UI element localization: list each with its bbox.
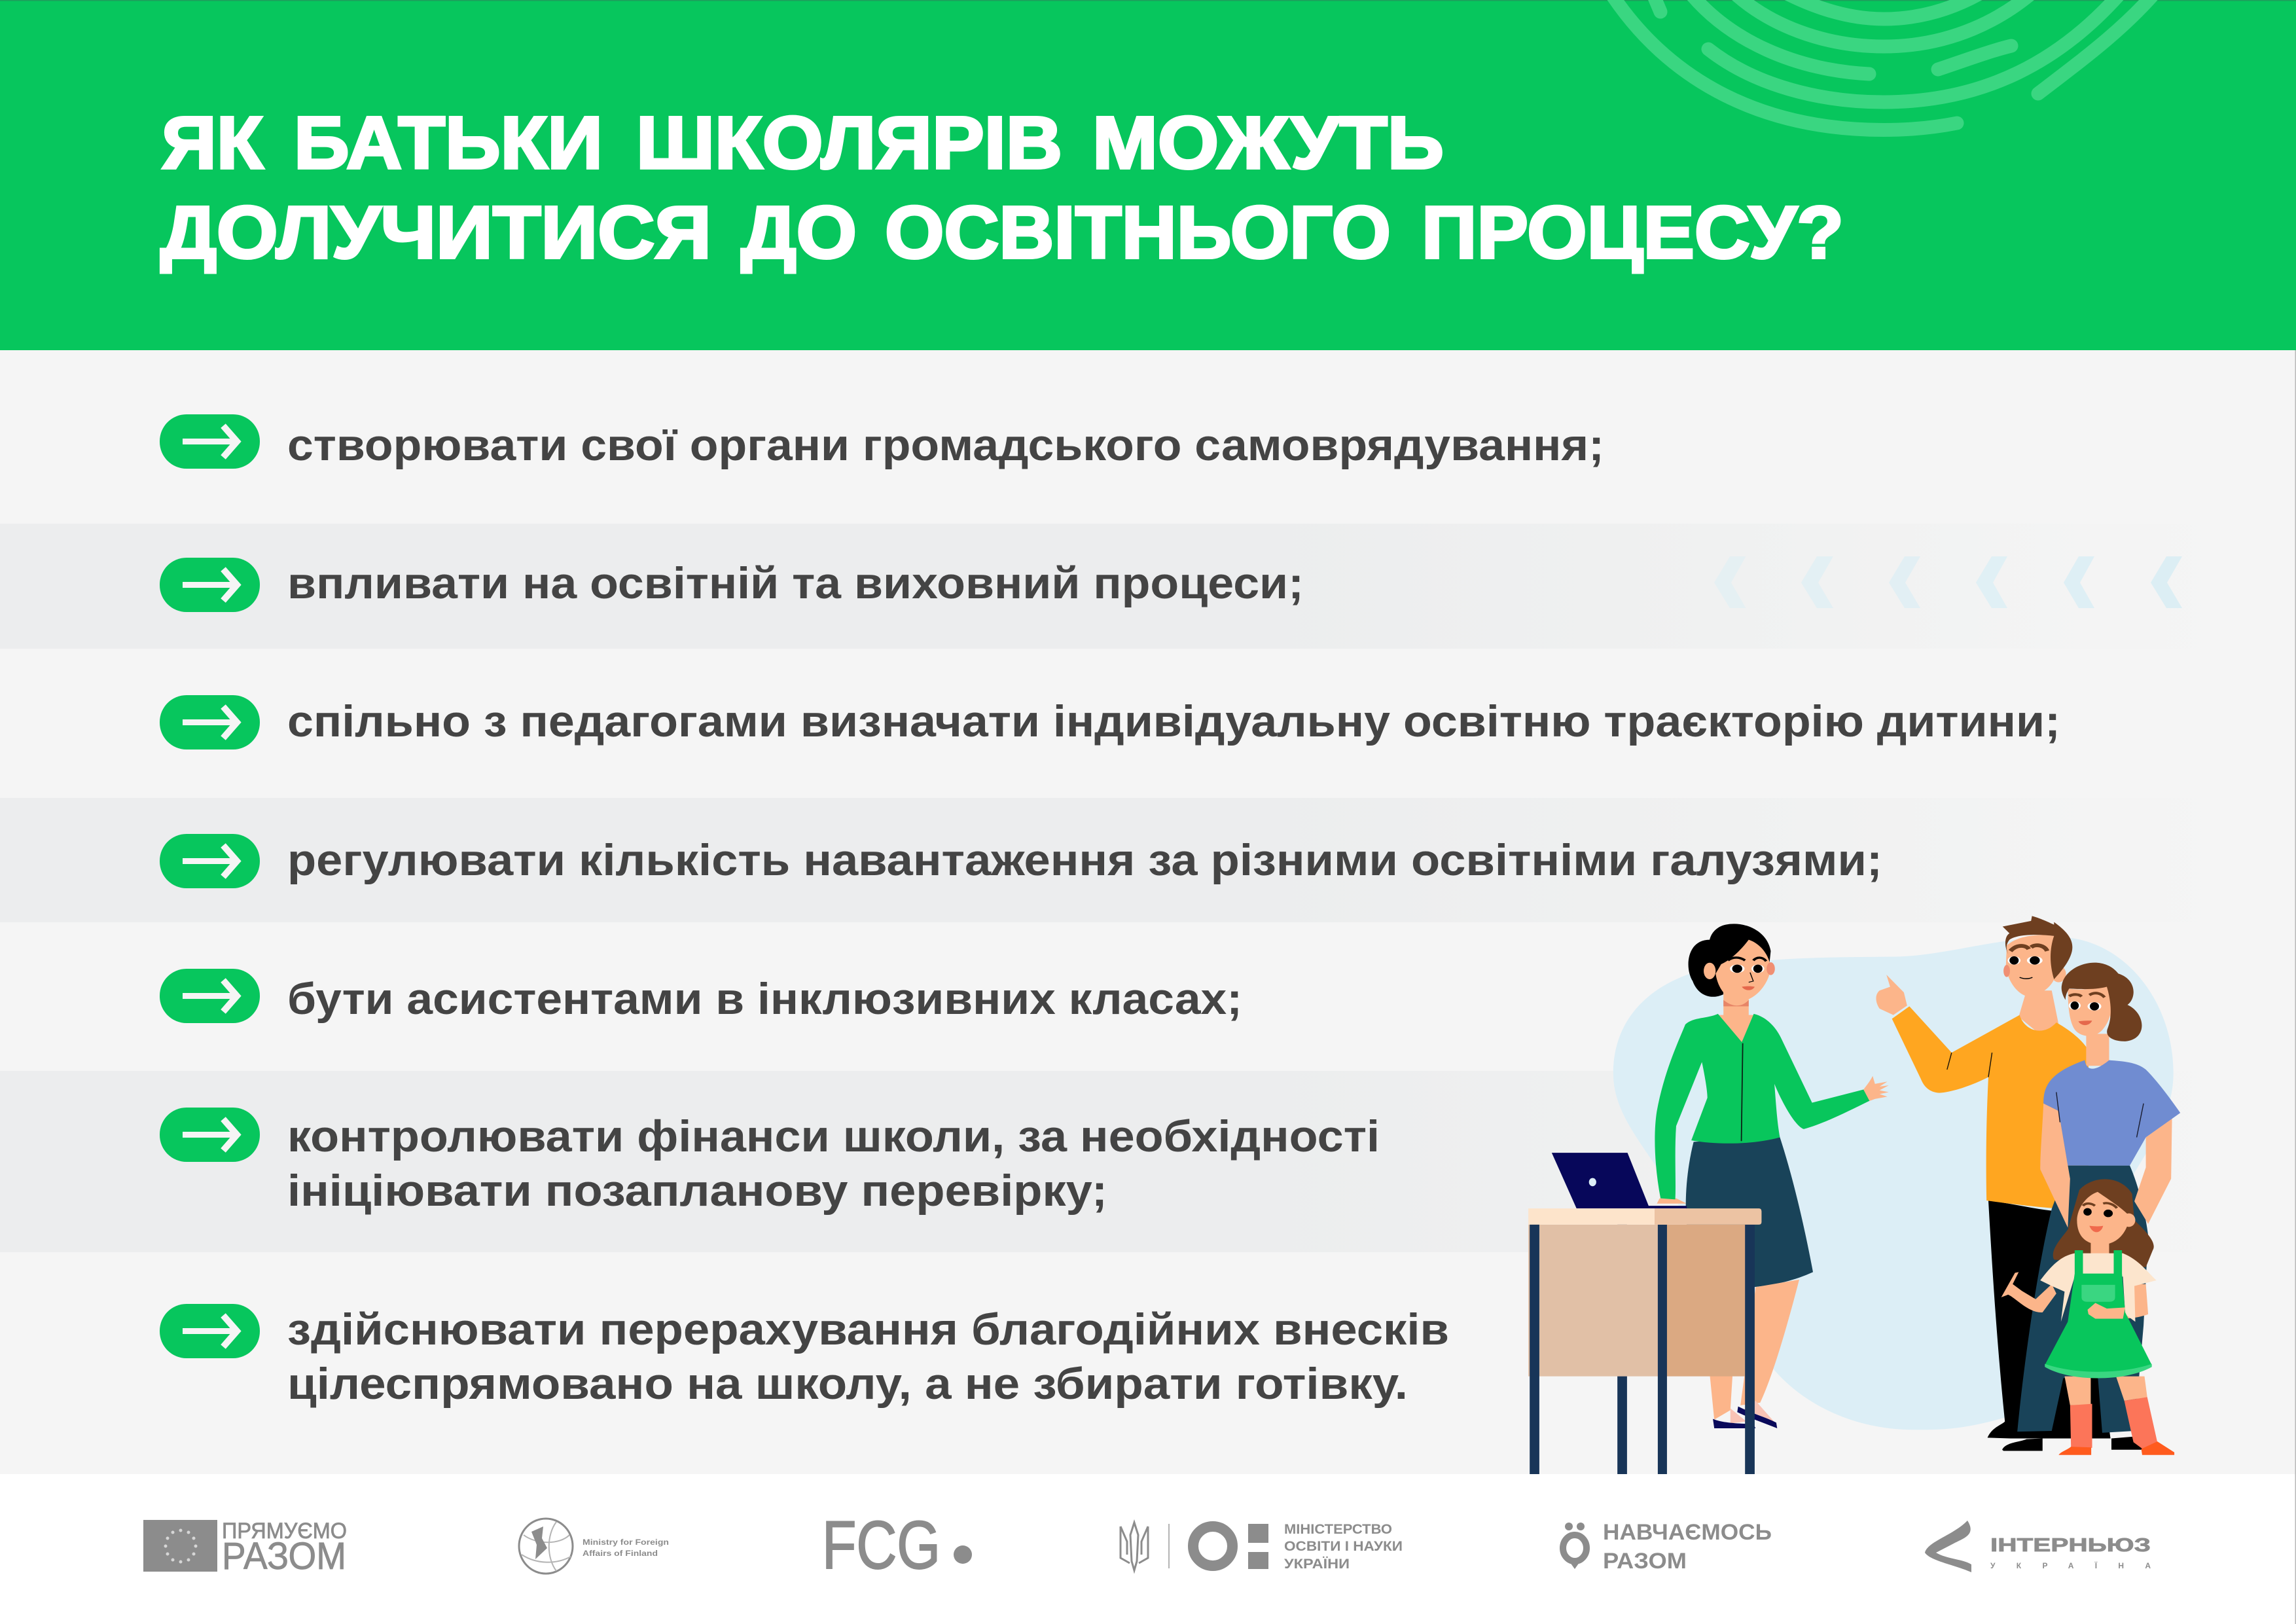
logo: Internews Ukraine: ІНТЕРНЬЮЗ <box>1990 1535 2151 1556</box>
icon: arrow pill 5 <box>160 969 260 1023</box>
header panel <box>0 0 2296 350</box>
logo: EU Прямуємо разом: ПРЯМУЄМО <box>222 1519 347 1543</box>
icon: arrow pill 6 <box>160 1108 260 1162</box>
list item 1: створювати свої органи громадського самоврядування; <box>287 420 1604 470</box>
list item 5: бути асистентами в інклюзивних класах; <box>287 974 1242 1024</box>
list item 6: ініціювати позапланову перевірку; <box>287 1166 1107 1216</box>
band: row 6 <box>0 1071 2296 1252</box>
logo: Ministry for Foreign Affairs of Finland: Affairs of Finland <box>583 1549 658 1558</box>
title: ОСВІТНЬОГО <box>885 191 1391 274</box>
right edge line <box>2295 350 2296 1624</box>
list item 7 <box>160 1304 1449 1409</box>
mother figure <box>2002 963 2180 1451</box>
icon: arrow pill 1 <box>160 414 260 469</box>
band: row 4 <box>0 798 2296 922</box>
background blob <box>1613 937 2174 1430</box>
icon: arrow pill 3 <box>160 695 260 749</box>
title <box>160 101 1844 274</box>
logo: Ministry of Education and Science of Ukraine: ОСВІТИ І НАУКИ <box>1284 1539 1403 1554</box>
title: ПРОЦЕСУ? <box>1422 191 1844 274</box>
logo: Ministry for Foreign Affairs of Finland <box>519 1519 669 1574</box>
list item 6: контролювати фінанси школи, за необхідності <box>287 1111 1380 1161</box>
band: row 2 <box>0 524 2296 649</box>
title: ЯК <box>162 101 264 184</box>
decorative chevrons <box>1714 556 2182 608</box>
logo: Ministry of Education and Science of Ukraine: УКРАЇНИ <box>1284 1557 1350 1572</box>
desk with laptop <box>1528 1153 1761 1482</box>
list item 2: впливати на освітній та виховний процеси; <box>287 558 1304 608</box>
list item 4: регулювати кількість навантаження за різними освітніми галузями; <box>287 835 1882 885</box>
title: МОЖУТЬ <box>1092 101 1444 184</box>
father figure <box>1876 916 2111 1439</box>
laptop <box>1552 1153 1687 1208</box>
title: ДО <box>741 191 857 274</box>
title: ДОЛУЧИТИСЯ <box>160 191 711 274</box>
list item 7: здійснювати перерахування благодійних внесків <box>287 1305 1449 1354</box>
logo: Ministry of Education and Science of Ukraine <box>1121 1522 1403 1572</box>
teacher figure <box>1655 924 1889 1428</box>
icon: arrow pill 4 <box>160 834 260 888</box>
icon: arrow pill 2 <box>160 558 260 612</box>
icon: arrow pill 7 <box>160 1304 260 1358</box>
girl figure <box>2001 1179 2174 1455</box>
illustration: teacher and family <box>1528 916 2180 1482</box>
logo: Internews Ukraine: УКРАЇНА <box>1990 1561 2151 1570</box>
title: ШКОЛЯРІВ <box>636 101 1062 184</box>
list item 7: цілеспрямовано на школу, а не збирати готівку. <box>287 1359 1408 1409</box>
logo: Навчаємось разом: РАЗОМ <box>1603 1549 1687 1574</box>
header decorative rings <box>1607 0 2160 130</box>
title: БАТЬКИ <box>294 101 603 184</box>
logo: EU Прямуємо разом: РАЗОМ <box>222 1535 346 1578</box>
logo: Навчаємось разом <box>1563 1520 1772 1574</box>
list item 6 <box>160 1108 1380 1216</box>
logo: Навчаємось разом: НАВЧАЄМОСЬ <box>1603 1520 1772 1545</box>
list item 3: спільно з педагогами визначати індивідуальну освітню траєкторію дитини; <box>287 696 2060 746</box>
logo: Internews Ukraine <box>1925 1521 2151 1572</box>
logo: FCG: FCG <box>822 1507 941 1583</box>
logo: EU Прямуємо разом <box>143 1519 347 1578</box>
footer panel <box>0 1474 2296 1624</box>
logo: Ministry for Foreign Affairs of Finland: Ministry for Foreign <box>583 1538 669 1547</box>
logo: Ministry of Education and Science of Ukraine: МІНІСТЕРСТВО <box>1284 1522 1392 1537</box>
